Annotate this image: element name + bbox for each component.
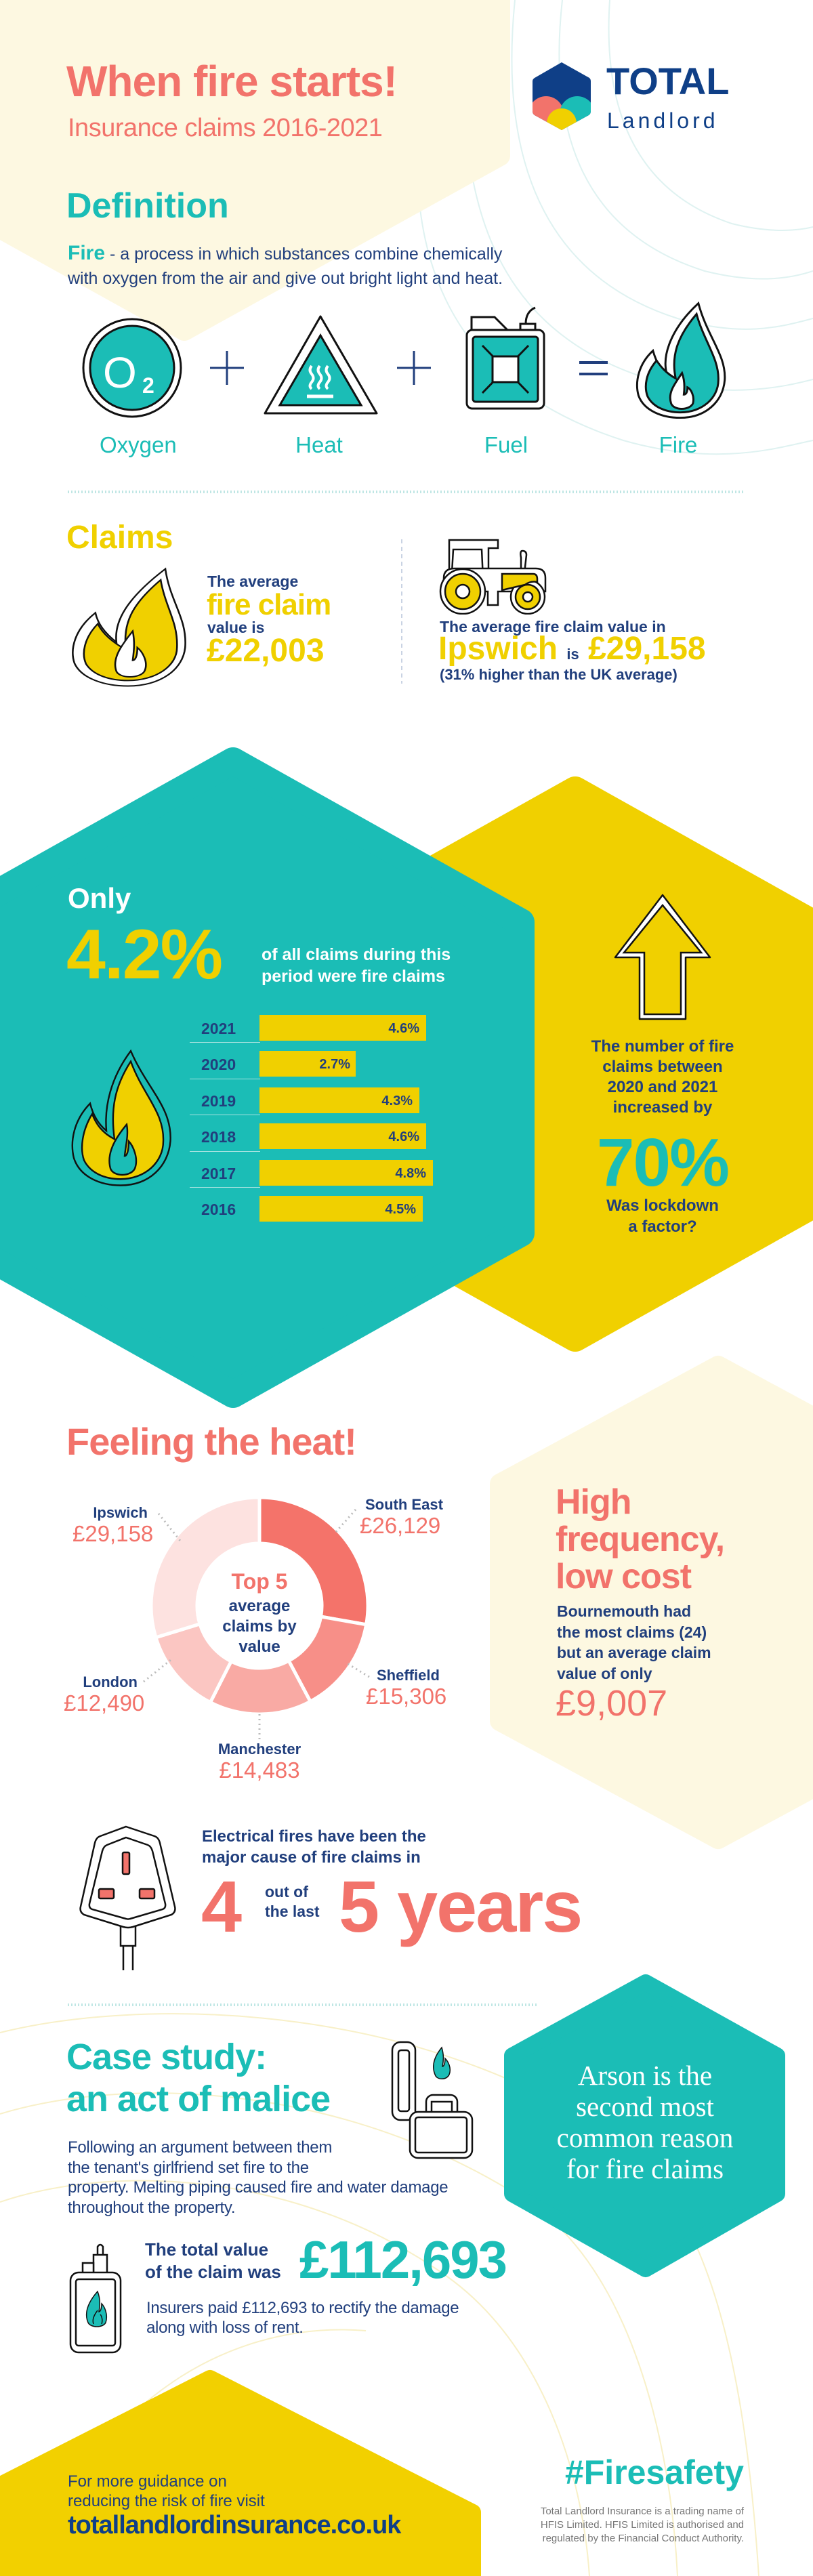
footer: guidance	[68, 2472, 401, 2539]
panel: only 4.2%: period were fire claims	[262, 967, 445, 986]
footer: guidance: totallandlordinsurance.co.uk	[68, 2511, 400, 2539]
panel: high frequency low cost: £9,007	[556, 1683, 667, 1724]
panel: 70% increase: 2020 and 2021	[608, 1078, 717, 1096]
disclaimer: Total Landlord Insurance is a trading name of	[541, 2506, 744, 2517]
bar 2021: 2021	[201, 1020, 236, 1037]
panel: electrical fires: out of	[265, 1883, 308, 1900]
donut chart: £15,306	[366, 1684, 446, 1709]
case study text: Following an argument between them	[68, 2138, 332, 2157]
panel: high frequency low cost	[556, 1482, 724, 1724]
case study text: property. Melting piping caused fire and water damage	[68, 2178, 448, 2197]
panel: 70% increase: claims between	[602, 1058, 723, 1076]
panel: electrical fires: the last	[265, 1903, 320, 1920]
bar 2016: 2016	[201, 1201, 236, 1218]
panel: ipswich claim: The average fire claim value in	[440, 618, 666, 636]
icon: yellow fire	[72, 568, 186, 687]
panel: 70% increase: increased by	[613, 1098, 712, 1117]
case study text	[68, 2138, 448, 2217]
bar 2020: 2020	[201, 1056, 236, 1073]
heading: claims: Claims	[66, 520, 173, 556]
footer: guidance: For more guidance on	[68, 2472, 227, 2491]
callout: arson: common reason	[557, 2122, 733, 2153]
bar 2020	[201, 1051, 356, 1077]
icon: oxygen	[83, 319, 181, 417]
label: sheffield: Sheffield	[377, 1667, 440, 1684]
label: south east: South East	[365, 1496, 443, 1513]
bar 2018	[201, 1123, 426, 1149]
panel: only 4.2%: 4.2%	[66, 915, 222, 994]
panel: average claim: The average	[207, 573, 298, 590]
panel: total value: The total value	[145, 2239, 268, 2260]
icon: tractor	[439, 539, 546, 615]
panel: high frequency low cost: the most claims (24)	[557, 1623, 707, 1641]
panel: total value: along with loss of rent.	[146, 2319, 304, 2337]
panel: average claim: fire claim	[207, 588, 331, 621]
labels: Oxygen	[100, 432, 177, 457]
panel: ipswich claim	[438, 539, 706, 683]
plus	[397, 351, 431, 385]
panel: 70% increase: 70%	[597, 1125, 728, 1201]
case study text: throughout the property.	[68, 2198, 235, 2217]
callout: arson: for fire claims	[566, 2153, 724, 2184]
panel: high frequency low cost: High	[556, 1482, 631, 1522]
panel: average claim	[72, 568, 331, 687]
bar 2018: 2018	[201, 1128, 236, 1146]
icon: up arrow	[614, 894, 711, 1020]
equation icons: Fuel	[484, 432, 528, 457]
donut chart	[64, 1496, 446, 1783]
bar 2017: 2017	[201, 1165, 236, 1182]
disclaimer: HFIS Limited. HFIS Limited is authorised and	[541, 2519, 744, 2531]
bar 2016: 4.5%	[385, 1202, 416, 1217]
bar 2019: 4.3%	[381, 1094, 413, 1108]
panel: total value: Insurers paid £112,693 to rectify the damage	[146, 2299, 459, 2317]
panel: high frequency low cost: but an average claim	[557, 1644, 711, 1661]
bar 2021: 4.6%	[388, 1021, 419, 1036]
equation icons	[83, 301, 726, 457]
yellow hexagon	[287, 790, 813, 1338]
icon: oxygen: O	[103, 348, 137, 397]
callout: arson: Arson is the	[578, 2060, 712, 2091]
cream hexagon right	[500, 1366, 813, 1839]
donut chart: £14,483	[219, 1758, 300, 1783]
bar 2017	[201, 1160, 433, 1186]
donut chart: claims by	[222, 1617, 297, 1636]
panel: electrical fires: major cause of fire claims in	[202, 1848, 421, 1867]
icon: teal fire	[72, 1049, 171, 1186]
donut chart: £29,158	[72, 1521, 153, 1546]
label: london: London	[83, 1674, 138, 1690]
case study text: the tenant's girlfriend set fire to the	[68, 2159, 309, 2176]
icon: fire	[637, 304, 725, 418]
panel: 70% increase: Was lockdown	[606, 1197, 719, 1215]
cream hexagon top	[0, 0, 500, 331]
equation icons: Fire	[659, 432, 697, 457]
plus	[210, 351, 244, 385]
logo: Landlord	[607, 108, 719, 133]
donut chart: Top 5	[232, 1569, 287, 1594]
donut chart: £12,490	[64, 1690, 144, 1716]
panel: 70% increase: The number of fire	[591, 1037, 734, 1056]
equation icons: Heat	[295, 432, 343, 457]
icon: plug	[79, 1825, 176, 1970]
arson hexagon	[512, 1982, 777, 2269]
donut chart: value	[238, 1638, 280, 1656]
panel: high frequency low cost: Bournemouth had	[557, 1602, 691, 1620]
panel: 70% increase: a factor?	[628, 1218, 697, 1236]
panel: 70% increase	[591, 894, 734, 1236]
panel: only 4.2%: Only	[68, 882, 131, 914]
heading: case study	[66, 2037, 330, 2119]
bar 2017: 4.8%	[395, 1166, 426, 1181]
logo: TOTAL	[606, 60, 729, 102]
donut chart: average	[229, 1597, 290, 1615]
panel: electrical fires: 5 years	[339, 1865, 581, 1947]
bar chart	[190, 1015, 433, 1222]
heading: definition: Definition	[66, 186, 229, 226]
panel: high frequency low cost: frequency,	[556, 1520, 724, 1559]
donut chart: £26,129	[360, 1513, 440, 1538]
panel: average claim: £22,003	[207, 633, 325, 669]
teal hexagon	[0, 761, 521, 1394]
footer: guidance: reducing the risk of fire visit	[68, 2492, 265, 2510]
heading: case study: Case study:	[66, 2037, 266, 2077]
callout: arson: second most	[576, 2091, 714, 2122]
definition text: with oxygen from the air and give out bright light and heat.	[68, 269, 503, 288]
dotted dividers	[68, 491, 744, 493]
panel: electrical fires: 4	[201, 1865, 242, 1947]
definition text: Fire - a process in which substances combine chemically	[68, 242, 502, 264]
bar 2018: 4.6%	[388, 1129, 419, 1144]
panel: total value	[69, 2230, 506, 2354]
panel: only 4.2%	[66, 882, 451, 1186]
hashtag: #Firesafety	[565, 2453, 744, 2491]
icon: extinguisher	[69, 2244, 122, 2354]
bar 2019	[201, 1087, 419, 1113]
panel: total value: of the claim was	[145, 2262, 281, 2282]
icon: heat	[265, 316, 377, 413]
callout: arson	[557, 2060, 733, 2184]
panel: electrical fires	[79, 1825, 581, 1970]
subtitle: Insurance claims 2016-2021	[68, 114, 382, 142]
panel: high frequency low cost: low cost	[556, 1557, 691, 1596]
bottom yellow hexagon	[0, 2378, 473, 2576]
icon: lighter	[392, 2041, 473, 2159]
logo	[533, 60, 729, 133]
equals	[579, 362, 608, 374]
title: When fire starts!	[66, 57, 397, 106]
disclaimer: regulated by the Financial Conduct Authority.	[543, 2533, 744, 2544]
definition text	[68, 242, 503, 288]
panel: average claim: value is	[207, 619, 264, 636]
panel: electrical fires: Electrical fires have been the	[202, 1827, 426, 1846]
bar 2019: 2019	[201, 1092, 236, 1110]
bar 2020: 2.7%	[319, 1057, 350, 1072]
icon: fuel	[467, 308, 544, 409]
panel: ipswich claim: (31% higher than the UK average)	[440, 666, 678, 683]
panel: high frequency low cost: value of only	[557, 1664, 652, 1682]
panel: only 4.2%: of all claims during this	[262, 945, 451, 964]
disclaimer	[541, 2506, 744, 2544]
panel: ipswich claim: Ipswich is £29,158	[438, 631, 706, 667]
icon: oxygen: 2	[142, 373, 154, 398]
label: manchester: Manchester	[218, 1741, 301, 1758]
panel: total value: £112,693	[299, 2230, 506, 2289]
heading: feeling the heat: Feeling the heat!	[66, 1420, 356, 1463]
background contour lines	[417, 0, 813, 454]
bar 2021	[201, 1015, 426, 1041]
label: ipswich: Ipswich	[93, 1504, 148, 1521]
bar 2016	[201, 1196, 423, 1222]
heading: case study: an act of malice	[66, 2079, 330, 2119]
